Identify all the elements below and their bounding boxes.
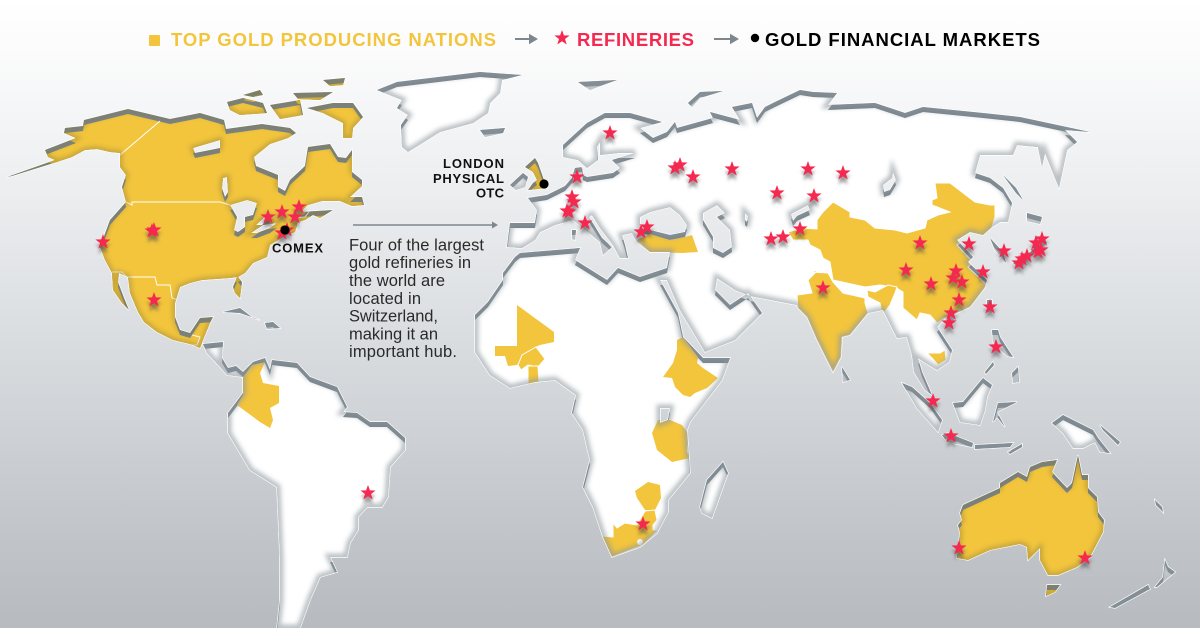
country: Ethiopia and Eritrea [663,337,718,397]
market: COMEX [272,225,323,256]
text block: Switzerland callout: Switzerland, [349,308,438,326]
country: Colombia [237,362,279,428]
market: London physical OTC: LONDON [443,156,504,171]
lesotho and swaziland cut-outs [637,539,643,545]
legend [149,29,1040,50]
text block: Switzerland callout: making it an [349,326,438,344]
country: India [797,270,868,372]
arrow: refineries to markets [714,36,737,42]
country: Zimbabwe [635,482,661,510]
country: Turkey [637,234,698,253]
text block: Switzerland callout: the world are [349,272,445,290]
refinery stars [103,133,1085,558]
country: Cambodia [928,350,946,364]
country: Tanzania [652,420,690,462]
soft gold coast shadow [7,78,1104,596]
land: North America, UK and Australia in gold [7,78,1104,601]
text block: Switzerland callout: located in [349,290,421,308]
text block: Switzerland callout: Four of the largest [349,236,484,254]
text block: Switzerland callout [349,236,484,361]
country: Burkina Faso [518,347,545,370]
legend: gold financial markets: GOLD FINANCIAL MARKETS [765,29,1040,50]
arrow: nations to refineries [515,36,536,42]
market: London physical OTC: PHYSICAL [433,171,504,186]
country: Mali [495,305,554,366]
text block: Switzerland callout: important hub. [349,343,457,361]
top gold producing countries [237,183,995,557]
soft coast shadow [203,72,1175,628]
country: South Africa [602,510,658,557]
country: Ghana [528,366,539,387]
country: China and Kyrgyzstan [788,183,995,323]
legend: refineries: REFINERIES [577,29,694,50]
border lines [112,121,312,345]
market: COMEX: COMEX [272,240,323,256]
legend: top gold producing nations: TOP GOLD PRODUCING NATIONS [171,29,496,50]
market: London physical OTC: OTC [476,186,505,200]
market: London physical OTC [433,156,549,200]
country: northeast India [867,285,897,315]
arrow: to Switzerland [353,222,498,228]
land: non-producing countries [203,72,1175,628]
text block: Switzerland callout: gold refineries in [349,254,471,272]
